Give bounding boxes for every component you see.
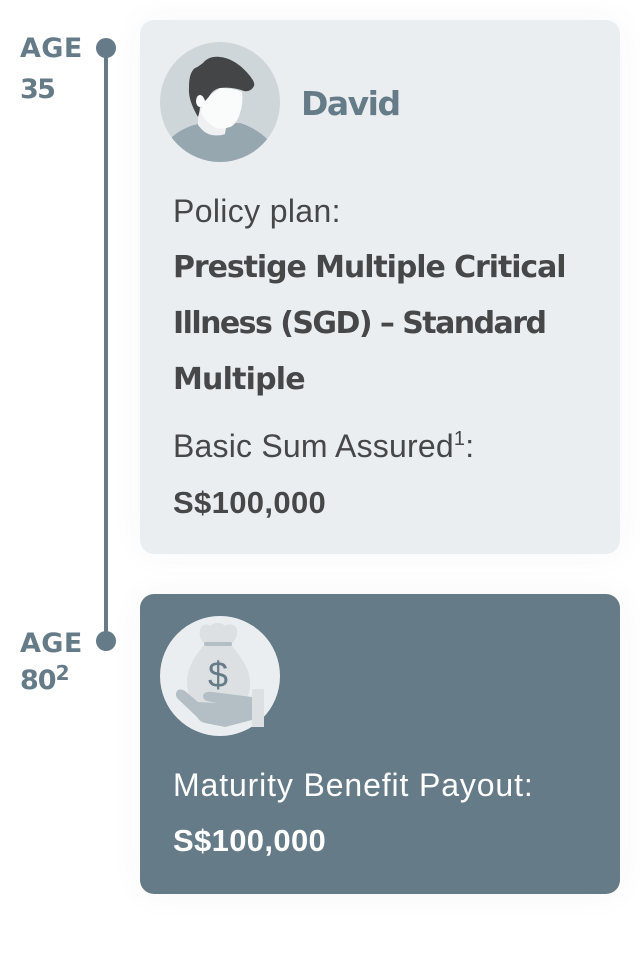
text: basic sum assured value: S$100,000: [173, 485, 326, 520]
timeline: [96, 38, 116, 651]
icon: money bag on hand: $: [208, 654, 228, 695]
age label: 35: 35: [20, 74, 54, 105]
text: policy plan label: Policy plan:: [173, 193, 341, 229]
panel: maturity benefit: [140, 594, 620, 894]
name: David: David: [301, 84, 400, 123]
age label: 80: [20, 628, 83, 696]
text: policy plan name: Multiple: [173, 362, 305, 397]
text: policy plan name: Prestige Multiple Critical: [173, 250, 566, 285]
text: policy plan name: [173, 250, 566, 397]
text: maturity benefit label: Maturity Benefit Payout:: [173, 767, 534, 803]
text: basic sum assured label: Basic Sum Assured1:: [173, 428, 474, 464]
age label: 80: AGE: [20, 628, 83, 659]
panel: David policy: [140, 20, 620, 554]
age label: 35: [20, 33, 83, 105]
text: maturity benefit value: S$100,000: [173, 823, 326, 858]
age label: 80: 802: [20, 661, 70, 696]
icon: David avatar: [160, 42, 280, 162]
text: policy plan name: Illness (SGD) – Standard: [173, 306, 545, 341]
icon: money bag on hand: [160, 616, 280, 736]
age label: 35: AGE: [20, 33, 83, 64]
